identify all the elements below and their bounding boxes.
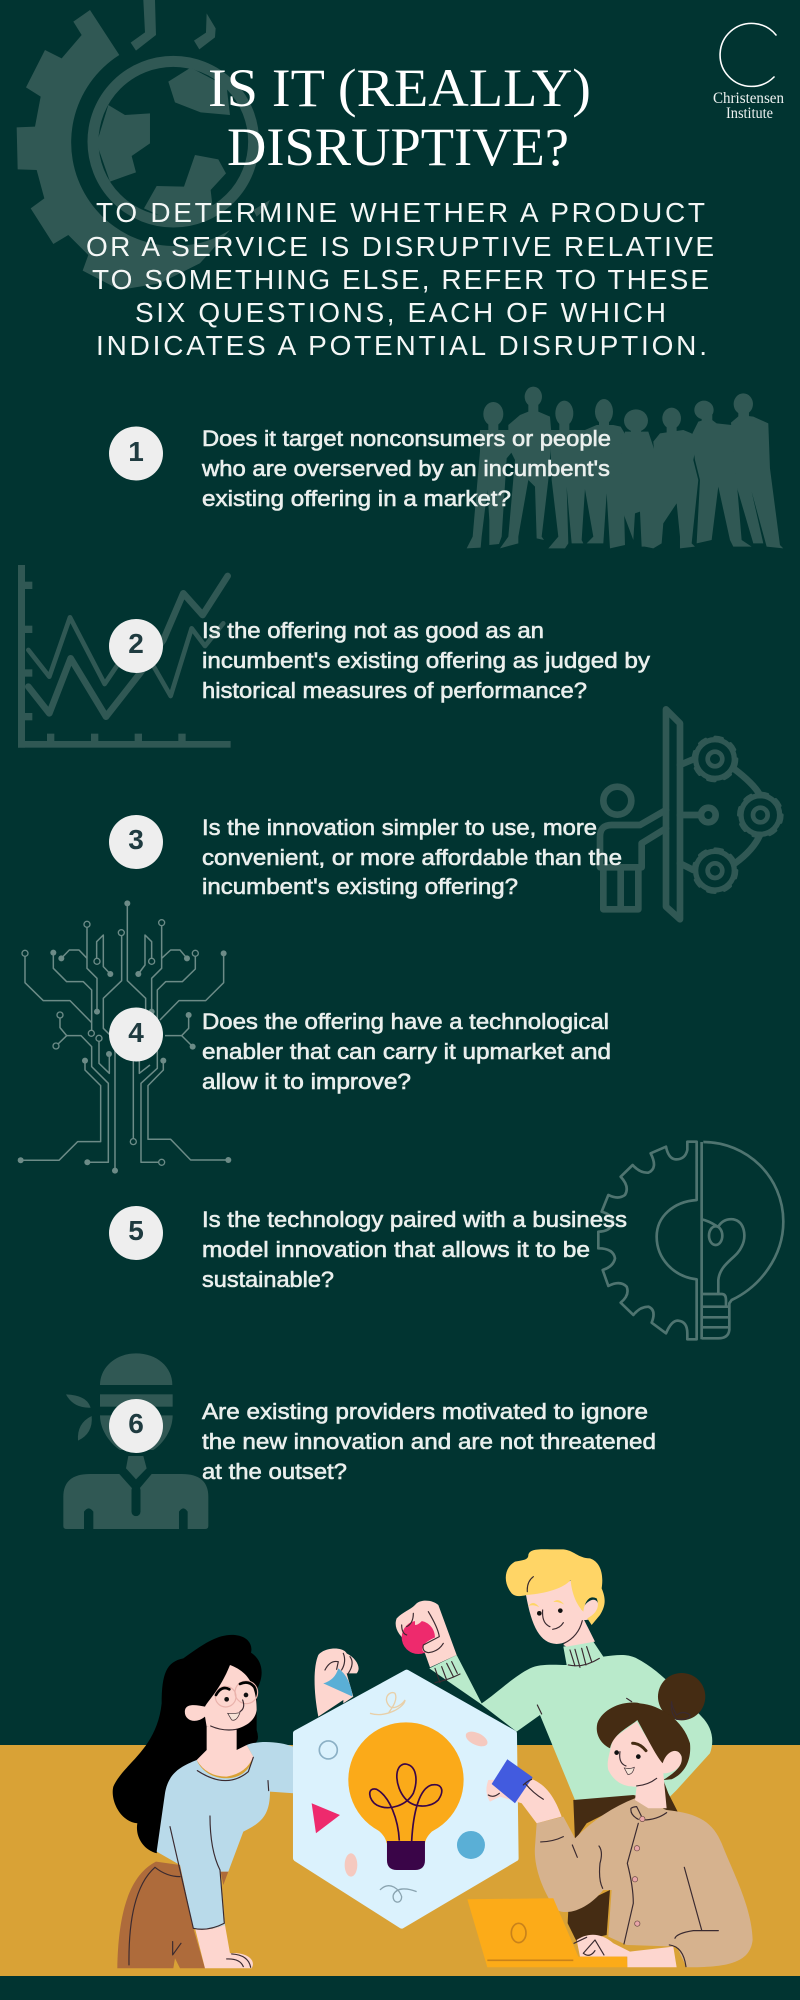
question 6: at the outset? [202,1459,347,1484]
question 4: allow it to improve? [202,1069,411,1094]
subtitle text block: INDICATES A POTENTIAL DISRUPTION. [96,330,707,361]
illustration: woman with hair bun and laptop [467,1673,753,1967]
question 2 [109,618,650,703]
icon: half gear half light bulb watermark [598,1142,783,1339]
question 5: model innovation that allows it to be [202,1237,590,1262]
question 3: convenient, or more affordable than the [202,845,622,870]
question 2: Is the offering not as good as an [202,618,544,643]
question 3: incumbent's existing offering? [202,874,518,899]
question 5: Is the technology paired with a business [202,1207,627,1232]
title: IS IT (REALLY) [208,58,591,118]
question 5: sustainable? [202,1267,334,1292]
icon: circuit tree watermark [18,900,231,1174]
question 4: Does the offering have a technological [202,1009,609,1034]
question 1: Does it target nonconsumers or people [202,426,611,451]
icon: crowd silhouette watermark [467,387,783,548]
title [208,58,591,177]
question 3 [109,815,622,899]
illustration: woman with glasses [113,1635,359,1968]
question 5: 5 [128,1215,144,1246]
icon: person at panel with gears watermark [600,709,782,919]
question 2: 2 [128,628,144,659]
question 3: 3 [128,824,144,855]
question 6 [109,1399,656,1484]
question 6: the new innovation and are not threatened [202,1429,656,1454]
question 2: incumbent's existing offering as judged by [202,648,650,673]
logo: Christensen Institute: Institute [726,105,773,122]
question 4 [109,1008,611,1094]
logo: Christensen Institute [713,23,784,122]
gold floor band [0,1745,800,1976]
question 5 [109,1206,627,1292]
question 6: 6 [128,1408,144,1439]
question 4: 4 [128,1017,144,1048]
question 1: existing offering in a market? [202,486,511,511]
logo: Christensen Institute: Christensen [713,90,784,107]
illustration: man in green sweater [396,1549,712,1800]
subtitle text block: SIX QUESTIONS, EACH OF WHICH [135,297,666,328]
question 6: Are existing providers motivated to ignore [202,1399,648,1424]
title: DISRUPTIVE? [227,117,569,177]
question 1: who are overserved by an incumbent's [201,456,610,481]
icon: line chart watermark [18,565,231,748]
icon: gear watermark [17,0,270,290]
question 3: Is the innovation simpler to use, more [202,815,597,840]
question 2: historical measures of performance? [202,678,587,703]
question 4: enabler that can carry it upmarket and [202,1039,611,1064]
subtitle text block: TO DETERMINE WHETHER A PRODUCT [96,197,705,228]
question 1 [109,426,611,511]
subtitle text block: OR A SERVICE IS DISRUPTIVE RELATIVE [86,231,714,262]
illustration: idea hexagon with light bulb [296,1673,516,1926]
subtitle text block: TO SOMETHING ELSE, REFER TO THESE [92,264,709,295]
question 1: 1 [128,436,144,467]
icon: person with bandana watermark [63,1353,208,1529]
subtitle text block [86,197,714,361]
